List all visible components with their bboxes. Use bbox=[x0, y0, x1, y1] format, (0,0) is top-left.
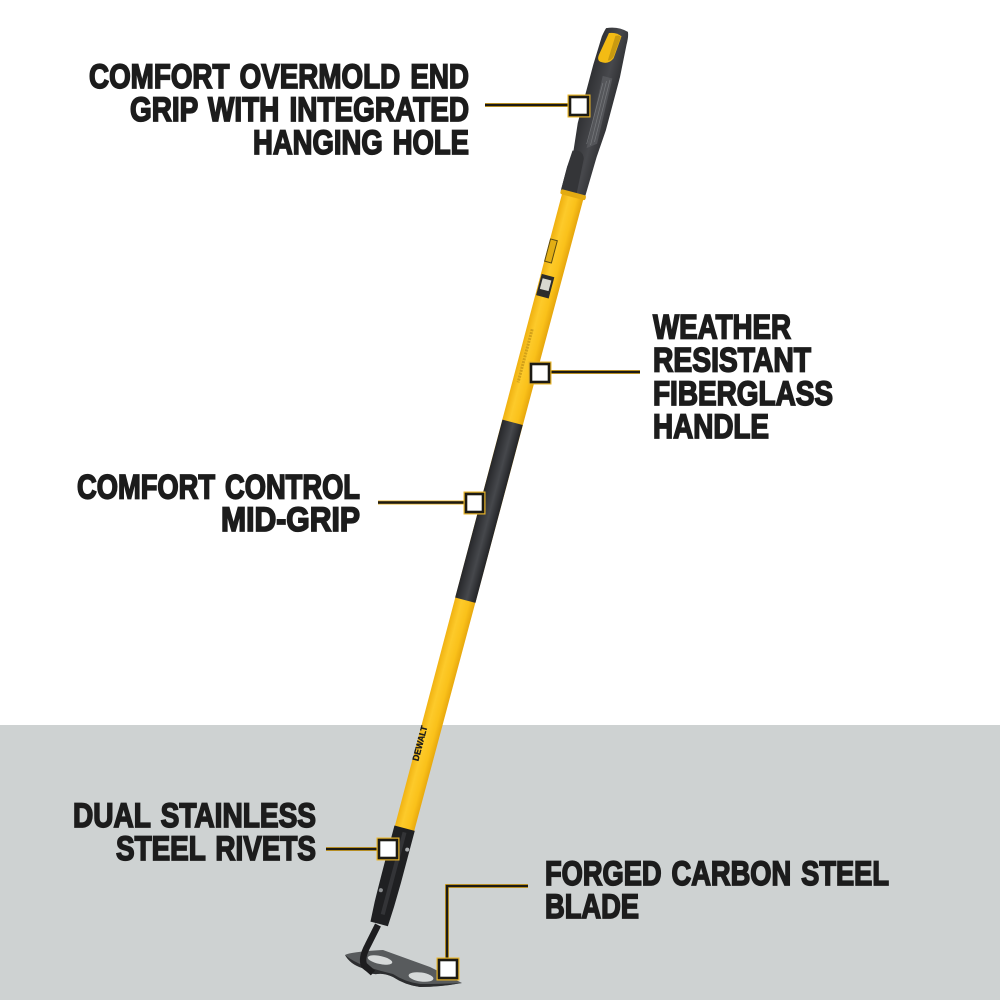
callout: fiberglass handle text: FIBERGLASS bbox=[653, 375, 833, 413]
DEWALT logo: DEWALT bbox=[410, 724, 430, 762]
callout: fiberglass handle text: HANDLE bbox=[653, 408, 769, 446]
forged blade bbox=[345, 925, 462, 987]
yellow fiberglass shaft bbox=[393, 187, 585, 835]
shaft labels bbox=[545, 239, 557, 263]
callout: end grip text bbox=[89, 58, 469, 162]
grey ground band bbox=[0, 725, 1000, 1000]
callout: fiberglass handle text: RESISTANT bbox=[653, 342, 811, 380]
mid grip bbox=[455, 420, 523, 603]
callout: rivets text bbox=[73, 797, 316, 868]
callout: fiberglass handle text: WEATHER bbox=[653, 308, 791, 346]
leader: end grip bbox=[485, 97, 588, 115]
callout: rivets text: STEEL RIVETS bbox=[116, 830, 316, 868]
leader: blade bbox=[439, 886, 528, 978]
callout: mid-grip text bbox=[77, 468, 360, 539]
callout: rivets text: DUAL STAINLESS bbox=[73, 797, 316, 835]
callout: end grip text: COMFORT OVERMOLD END bbox=[89, 58, 469, 96]
rivets bbox=[405, 847, 410, 852]
callout: end grip text: GRIP WITH INTEGRATED bbox=[130, 91, 469, 129]
grip collar bbox=[560, 189, 586, 201]
lower ferrule bbox=[369, 826, 415, 927]
callout: fiberglass handle text bbox=[653, 308, 833, 446]
handle bbox=[366, 24, 632, 928]
leader: fiberglass handle bbox=[531, 364, 640, 382]
callout: blade text: BLADE bbox=[545, 888, 639, 926]
leader: mid-grip bbox=[378, 494, 483, 512]
callout: blade text: FORGED CARBON STEEL bbox=[545, 855, 889, 893]
callout: blade text bbox=[545, 855, 889, 926]
callout: end grip text: HANGING HOLE bbox=[253, 124, 469, 162]
hanging hole bbox=[597, 31, 622, 65]
callout: mid-grip text: MID-GRIP bbox=[221, 501, 360, 539]
callout: mid-grip text: COMFORT CONTROL bbox=[77, 468, 360, 506]
leader: rivets bbox=[326, 840, 397, 858]
hoe tool bbox=[345, 24, 632, 987]
end grip bbox=[560, 24, 632, 198]
